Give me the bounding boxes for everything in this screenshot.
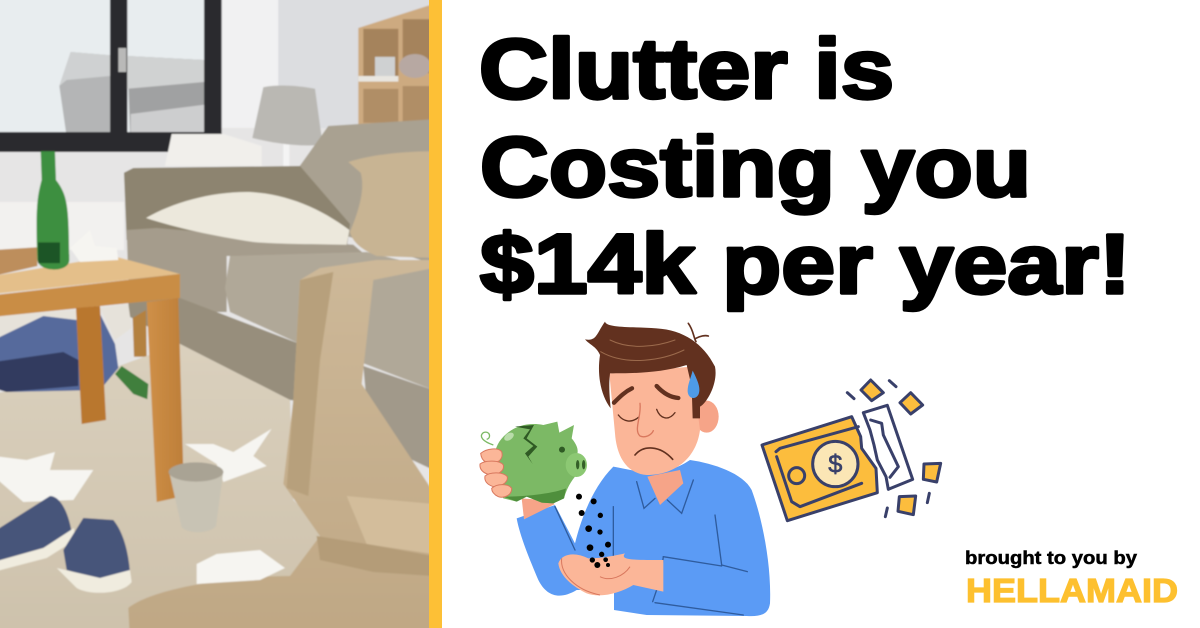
hand gripping piggy	[480, 449, 512, 497]
tissues	[0, 230, 285, 584]
face	[609, 367, 700, 475]
sweat drop	[688, 371, 699, 398]
logo: Hellamaid: HELLAMAID	[966, 572, 1178, 609]
title	[479, 22, 1131, 311]
green bottle on table	[37, 151, 69, 270]
carpet	[0, 344, 320, 628]
neck	[647, 470, 683, 505]
fallen green bottle	[115, 366, 148, 399]
illustration: sad man with broken piggy bank	[480, 322, 770, 616]
open hands	[558, 553, 663, 595]
shoes	[0, 496, 132, 593]
panel: cluttered living room photo	[0, 0, 460, 628]
brought to you by caption: brought to you by	[965, 548, 1137, 568]
hair	[585, 322, 716, 418]
blanket	[128, 260, 433, 628]
facial features	[614, 386, 678, 459]
icon: torn dollar bill: $	[828, 451, 842, 479]
falling coins	[576, 494, 611, 568]
radiator	[0, 202, 124, 250]
blue clothes	[0, 304, 132, 392]
sofa	[124, 119, 433, 470]
white cushion behind sofa	[165, 134, 262, 166]
shirt	[517, 460, 770, 616]
wrist under piggy	[522, 498, 555, 519]
lamp	[252, 85, 322, 166]
title: $14k per year!	[480, 217, 1131, 311]
ear	[695, 401, 719, 433]
cup	[169, 462, 223, 532]
title: Clutter is	[479, 22, 894, 116]
coffee table	[0, 247, 184, 502]
title: Costing you	[480, 120, 1031, 214]
window	[0, 0, 222, 152]
bookshelf	[358, 4, 433, 124]
yellow divider bar	[429, 0, 442, 628]
icon: torn dollar bill	[762, 380, 941, 521]
pillows	[146, 151, 433, 258]
broken piggy bank	[481, 422, 587, 503]
